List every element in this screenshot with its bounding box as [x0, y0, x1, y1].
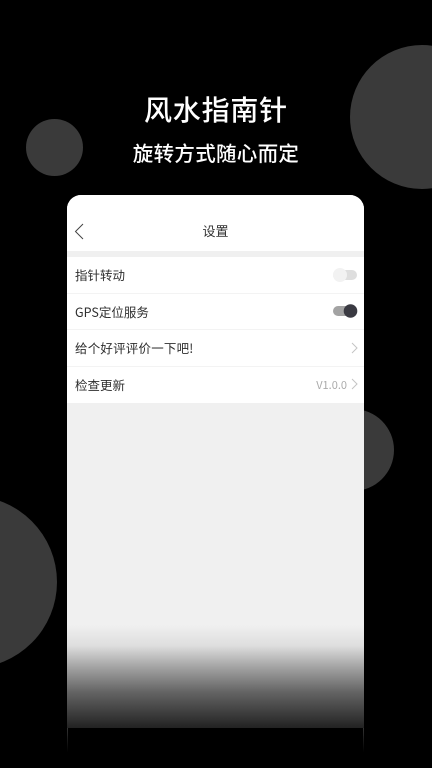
title: 风水指南针	[144, 89, 288, 129]
decorative circle: top left	[26, 119, 83, 176]
panel: phone screen	[67, 195, 364, 728]
icon: chevron	[352, 342, 358, 354]
decorative circle: bottom left	[0, 496, 57, 668]
label: GPS定位服务	[75, 302, 149, 320]
bottom fade	[67, 625, 364, 728]
label: 给个好评评价一下吧!	[75, 338, 194, 356]
version text: V1.0.0	[316, 376, 347, 392]
toggle: off	[333, 268, 357, 282]
header bar	[67, 195, 364, 251]
fading side edges below panel	[67, 728, 364, 748]
label: 检查更新	[75, 374, 125, 394]
heading: settings: 设置	[202, 221, 228, 240]
icon: chevron	[352, 378, 358, 390]
row: update	[67, 367, 364, 403]
row: rate	[67, 330, 364, 366]
icon: back arrow	[74, 224, 84, 240]
decorative circle: top right	[350, 45, 432, 189]
label: 指针转动	[75, 264, 125, 284]
toggle: on	[333, 304, 358, 318]
subtitle: 旋转方式随心而定	[133, 137, 299, 167]
decorative circle: middle right	[312, 409, 394, 491]
row: GPS	[67, 294, 364, 330]
row: pointer rotation	[67, 257, 364, 293]
